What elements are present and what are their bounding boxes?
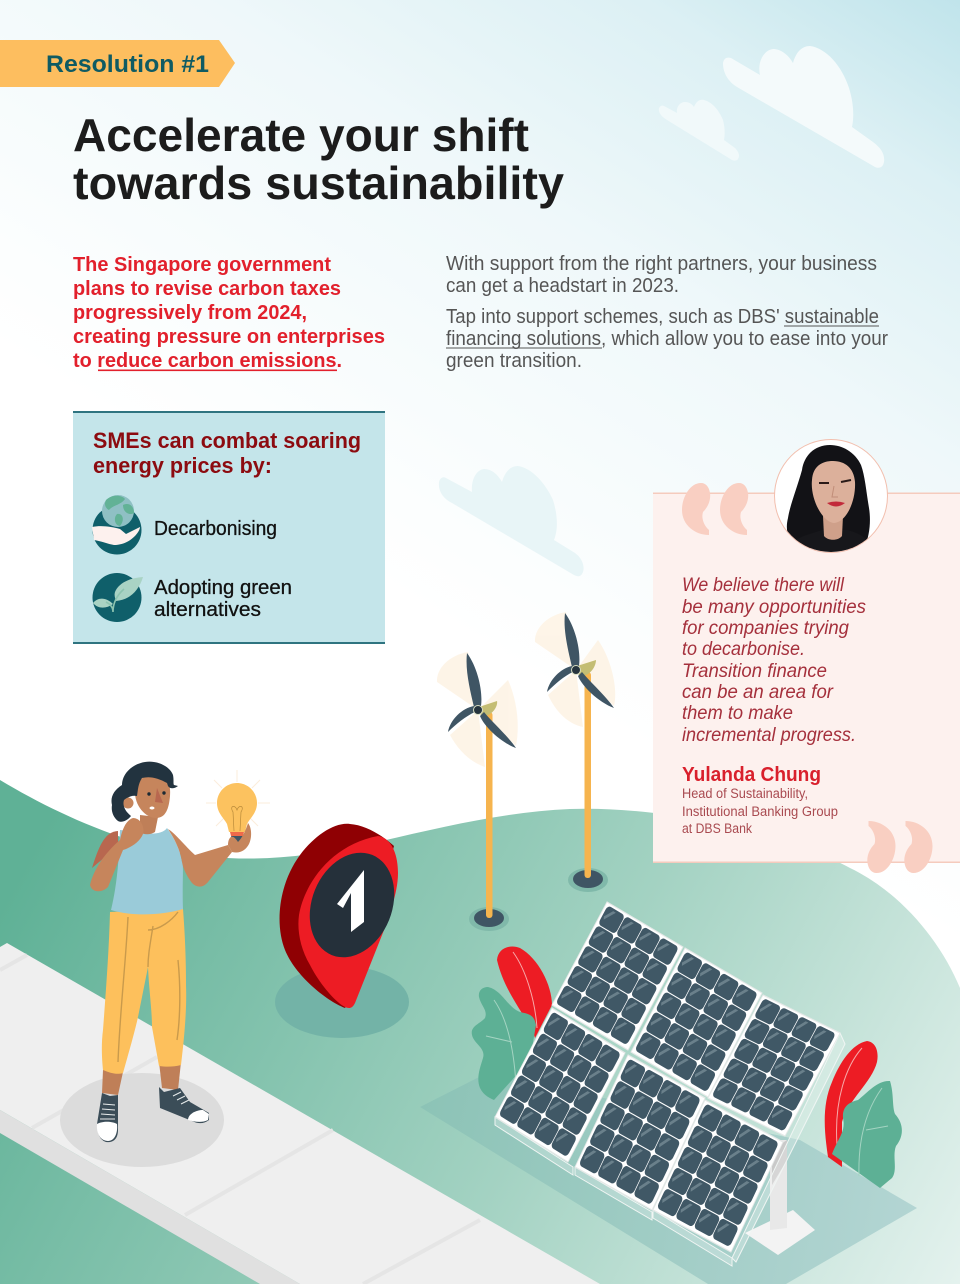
- cloud: small top right: [659, 100, 739, 161]
- quote text: [682, 574, 866, 746]
- support paragraph: can get a headstart in 2023.: [446, 275, 679, 297]
- quote text: be many opportunities: [682, 596, 866, 618]
- label: Adopting green alternatives: [154, 577, 292, 621]
- hair: [111, 762, 178, 822]
- head: [135, 775, 170, 818]
- quote attribution: at DBS Bank: [682, 821, 752, 836]
- footpath: [0, 943, 600, 1284]
- red intro paragraph: creating pressure on enterprises: [73, 325, 385, 348]
- shirt: [111, 828, 183, 914]
- plant: right: [825, 1041, 902, 1188]
- face details: [155, 788, 163, 803]
- quote text: We believe there will: [682, 574, 845, 596]
- pants: [102, 909, 186, 1074]
- support paragraph: financing solutions, which allow you to ease into your: [446, 328, 888, 350]
- shoe right: [159, 1087, 209, 1123]
- hand on bulb: [228, 823, 251, 853]
- quote text: for companies trying: [682, 617, 849, 639]
- panel heading: SMEs can combat soaring: [93, 428, 361, 453]
- quote attribution: Head of Sustainability,: [682, 786, 808, 801]
- quote text: incremental progress.: [682, 724, 856, 746]
- cloud: middle: [439, 466, 584, 576]
- title: towards sustainability: [73, 157, 564, 209]
- panel: SMEs energy prices: [73, 411, 385, 644]
- location pin with number 1: [275, 824, 409, 1038]
- quote text: Transition finance: [682, 660, 827, 682]
- neck: [140, 815, 158, 834]
- support paragraph: Tap into support schemes, such as DBS' sustainable: [446, 306, 879, 328]
- quote text: can be an area for: [682, 681, 834, 703]
- support paragraph: With support from the right partners, your business: [446, 253, 877, 275]
- red intro paragraph: The Singapore government: [73, 253, 331, 276]
- label: Decarbonising: Decarbonising: [154, 518, 277, 540]
- cloud: large top right: [723, 46, 884, 168]
- panel frame: [495, 1033, 845, 1266]
- right arm holding bulb: [168, 829, 232, 887]
- solar panel shadow: [420, 1073, 917, 1284]
- banner: Resolution #1: [0, 40, 235, 87]
- ankles: [102, 1062, 181, 1095]
- back shoulder: [92, 831, 118, 868]
- wind turbine: right: [535, 612, 615, 892]
- red intro paragraph: [73, 253, 385, 372]
- quote text: to decarbonise.: [682, 638, 805, 660]
- title: [73, 109, 564, 209]
- portrait photo: [774, 440, 888, 560]
- title: Accelerate your shift: [73, 109, 529, 161]
- label: Adopting green alternatives: Adopting green: [154, 577, 292, 599]
- support paragraph: green transition.: [446, 350, 582, 372]
- quote text: them to make: [682, 702, 793, 724]
- icon: globe in hand: [92, 495, 142, 554]
- person with light bulb: [60, 762, 270, 1167]
- shoe left: [97, 1093, 118, 1142]
- wind turbine: left: [437, 652, 518, 931]
- label: Adopting green alternatives: alternatives: [154, 599, 261, 621]
- open quote marks: [682, 483, 748, 535]
- red intro paragraph: plans to revise carbon taxes: [73, 277, 341, 300]
- red intro paragraph: to reduce carbon emissions.: [73, 349, 342, 372]
- green hill: [0, 780, 960, 1284]
- quote attribution: Yulanda Chung: [682, 764, 821, 786]
- plant: left: [472, 946, 552, 1100]
- solar stand: [745, 1140, 815, 1255]
- support paragraph: [446, 253, 888, 372]
- panel heading: [93, 428, 361, 478]
- solar panel array: [495, 902, 845, 1266]
- icon: leaves: [92, 573, 143, 622]
- panel heading: energy prices by:: [93, 453, 272, 478]
- red intro paragraph: progressively from 2024,: [73, 301, 307, 324]
- left arm to chin: [90, 818, 143, 891]
- close quote marks: [867, 821, 932, 873]
- quote attribution: [682, 764, 838, 836]
- banner: Resolution #1: Resolution #1: [46, 51, 209, 78]
- icon: light bulb: [206, 770, 270, 844]
- quote panel: [653, 440, 960, 873]
- quote attribution: Institutional Banking Group: [682, 804, 838, 819]
